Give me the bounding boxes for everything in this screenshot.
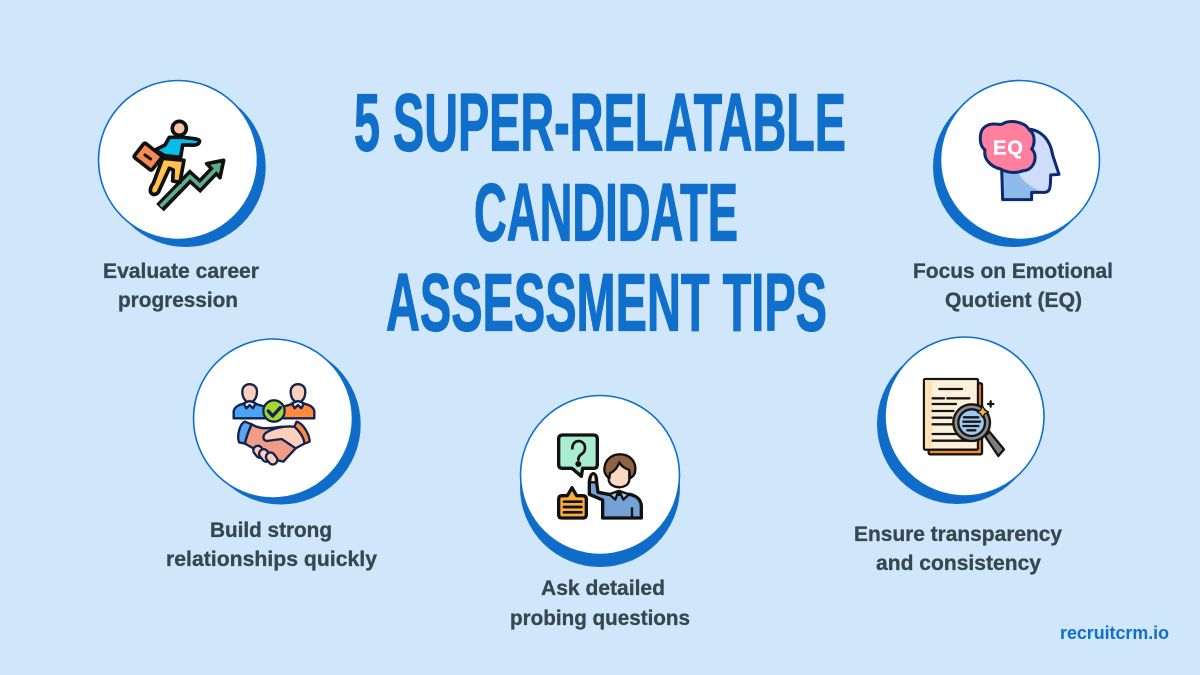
label: ensure transparency and consistency: and consistency (876, 552, 1041, 575)
label: evaluate career progression (103, 260, 259, 312)
title (354, 78, 846, 348)
title: CANDIDATE (474, 168, 738, 258)
label: evaluate career progression: Evaluate career (103, 260, 259, 283)
icon badge: relationships (194, 339, 361, 504)
icon badge: probing questions (520, 396, 680, 567)
label: evaluate career progression: progression (118, 289, 238, 312)
label: focus on emotional quotient: Quotient (EQ) (945, 289, 1082, 312)
icon badge: career progression (98, 80, 266, 247)
label: focus on emotional quotient: Focus on Emotional (913, 260, 1113, 283)
panel: focus on emotional quotient (913, 80, 1113, 312)
label: ask detailed probing questions: Ask detailed (541, 577, 665, 600)
label: build strong relationships (166, 519, 377, 571)
icon badge: transparency (877, 337, 1044, 504)
icon: person climbing growth arrow (134, 121, 224, 208)
label: focus on emotional quotient (913, 260, 1113, 312)
logo text: recruitcrm.io (1060, 623, 1169, 643)
panel: evaluate career progression (98, 80, 266, 312)
panel: build strong relationships (166, 339, 377, 571)
icon: head with EQ brain (980, 122, 1059, 200)
label: ask detailed probing questions: probing questions (510, 607, 690, 630)
label: ask detailed probing questions (510, 577, 690, 630)
icon badge: emotional quotient (933, 80, 1100, 247)
panel: ask detailed probing questions (510, 396, 690, 630)
title: 5 SUPER-RELATABLE (354, 78, 846, 168)
panel: ensure transparency and consistency (854, 337, 1062, 575)
icon: head with EQ brain: EQ (993, 137, 1023, 159)
title: ASSESSMENT TIPS (386, 258, 827, 348)
label: build strong relationships: relationships quickly (166, 548, 377, 571)
label: ensure transparency and consistency: Ensure transparency (854, 523, 1062, 546)
icon: two people and handshake (234, 384, 314, 466)
icon: documents and magnifier (924, 379, 1004, 456)
label: build strong relationships: Build strong (210, 519, 332, 542)
icon: person with speech bubbles (559, 435, 641, 518)
label: ensure transparency and consistency (854, 523, 1062, 575)
